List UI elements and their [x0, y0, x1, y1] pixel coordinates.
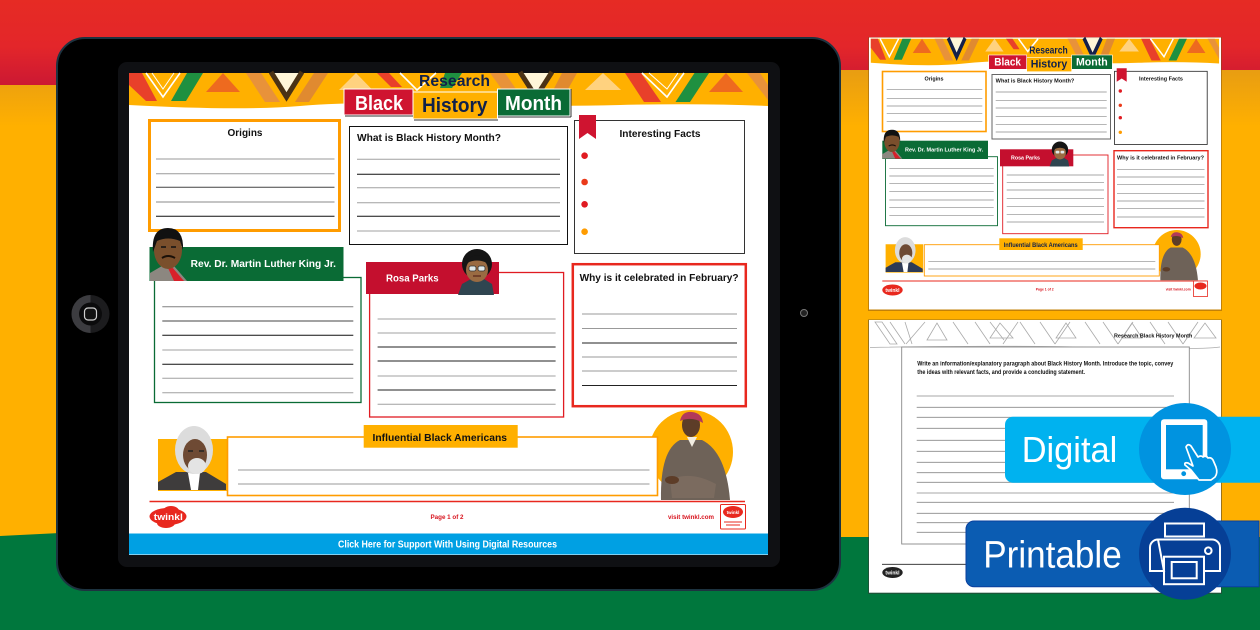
footer: [150, 502, 746, 529]
portrait: King: [150, 228, 187, 281]
portrait: Rosa Parks: [458, 249, 494, 295]
writing frame: the ideas with relevant facts, and provide a concluding statement.: [917, 370, 1085, 376]
panel: what is black history month: What is Black History Month?: [996, 78, 1075, 84]
panel: origins: Origins: [228, 128, 263, 139]
title: Black: [994, 57, 1022, 69]
footer: twinkl: [885, 570, 900, 576]
panel: rosa parks: Rosa Parks: [1011, 155, 1040, 161]
icon: tablet with hand: [1161, 419, 1217, 480]
panel: origins: [150, 120, 340, 230]
panel: why february: [573, 264, 746, 406]
panel: what is black history month: [992, 74, 1110, 139]
footer: visit twinkl.com: [1166, 288, 1191, 292]
tablet device: [57, 38, 840, 590]
thumbnail: page 1: [868, 37, 1222, 311]
title: History: [1031, 58, 1068, 70]
header pattern band: [871, 38, 1219, 65]
panel: interesting facts: Interesting Facts: [1139, 76, 1183, 82]
main worksheet page: [129, 72, 768, 555]
panel: influential black americans: Influential Black Americans: [1004, 243, 1078, 249]
footer: [882, 281, 1208, 296]
panel: martin luther king: [882, 130, 998, 226]
badge: digital: [1005, 403, 1260, 495]
panel: martin luther king: Rev. Dr. Martin Luther King Jr.: [191, 259, 336, 270]
footer: visit twinkl.com: [668, 514, 714, 521]
title: Month: [505, 93, 562, 115]
panel: influential black americans: Influential Black Americans: [372, 432, 507, 444]
badge: printable: [966, 508, 1259, 600]
writing frame: [902, 347, 1189, 544]
portrait: Douglass: [886, 237, 923, 273]
title: [344, 73, 571, 120]
portrait: Tubman: [649, 410, 733, 500]
thumbnail: page 2: Research Black History Month: [1114, 334, 1193, 340]
outline header pattern: [870, 322, 1220, 349]
support link bar: [129, 534, 768, 554]
twinkl logo: [150, 506, 186, 528]
panel: interesting facts: [574, 115, 744, 254]
home button: [72, 295, 110, 333]
title: Research: [419, 73, 490, 90]
quality badge: twinkl: [727, 510, 739, 515]
badge: digital: Digital: [1022, 429, 1117, 470]
portrait: Rosa Parks: [1050, 141, 1069, 167]
panel: origins: [882, 72, 986, 132]
portrait: King: [882, 130, 902, 159]
title: Research: [1029, 45, 1068, 56]
panel: what is black history month: [350, 126, 568, 244]
support link bar: Click Here for Support With Using Digital Resources: [338, 538, 557, 550]
title: History: [422, 95, 488, 117]
panel: why february: [1114, 151, 1208, 228]
twinkl logo: twinkl: [154, 512, 183, 523]
footer: Page 1 of 2: [1036, 288, 1054, 292]
title: [989, 45, 1112, 72]
panel: martin luther king: Rev. Dr. Martin Luther King Jr.: [905, 148, 984, 154]
panel: interesting facts: [1114, 68, 1207, 144]
footer: [882, 564, 1000, 578]
portrait: Douglass: [158, 426, 227, 491]
icon: ribbon: [579, 115, 596, 139]
panel: rosa parks: Rosa Parks: [386, 274, 439, 285]
title: Month: [1076, 57, 1108, 69]
panel: rosa parks: [1000, 141, 1108, 234]
panel: influential black americans: [886, 230, 1201, 280]
camera: [800, 310, 808, 316]
panel: rosa parks: [366, 249, 564, 417]
footer: Page 1 of 2: [430, 514, 464, 521]
panel: why february: Why is it celebrated in February?: [580, 273, 739, 284]
writing frame: Write an information/explanatory paragraph about Black History Month. Introduce the topic, convey: [917, 362, 1174, 368]
panel: interesting facts: Interesting Facts: [620, 129, 701, 140]
panel: why february: Why is it celebrated in February?: [1117, 155, 1205, 161]
quality badge: [720, 504, 746, 529]
panel: what is black history month: What is Black History Month?: [357, 133, 501, 144]
thumbnail: page 2: [868, 320, 1222, 594]
badge: printable: Printable: [983, 534, 1122, 576]
footer: twinkl: [885, 288, 900, 294]
panel: origins: Origins: [924, 77, 944, 83]
title: Black: [355, 93, 404, 115]
panel: martin luther king: [150, 228, 361, 402]
panel: influential black americans: [158, 410, 733, 500]
portrait: Tubman: [1153, 230, 1201, 280]
icon: printer: [1150, 524, 1220, 584]
header pattern band: [129, 72, 768, 108]
